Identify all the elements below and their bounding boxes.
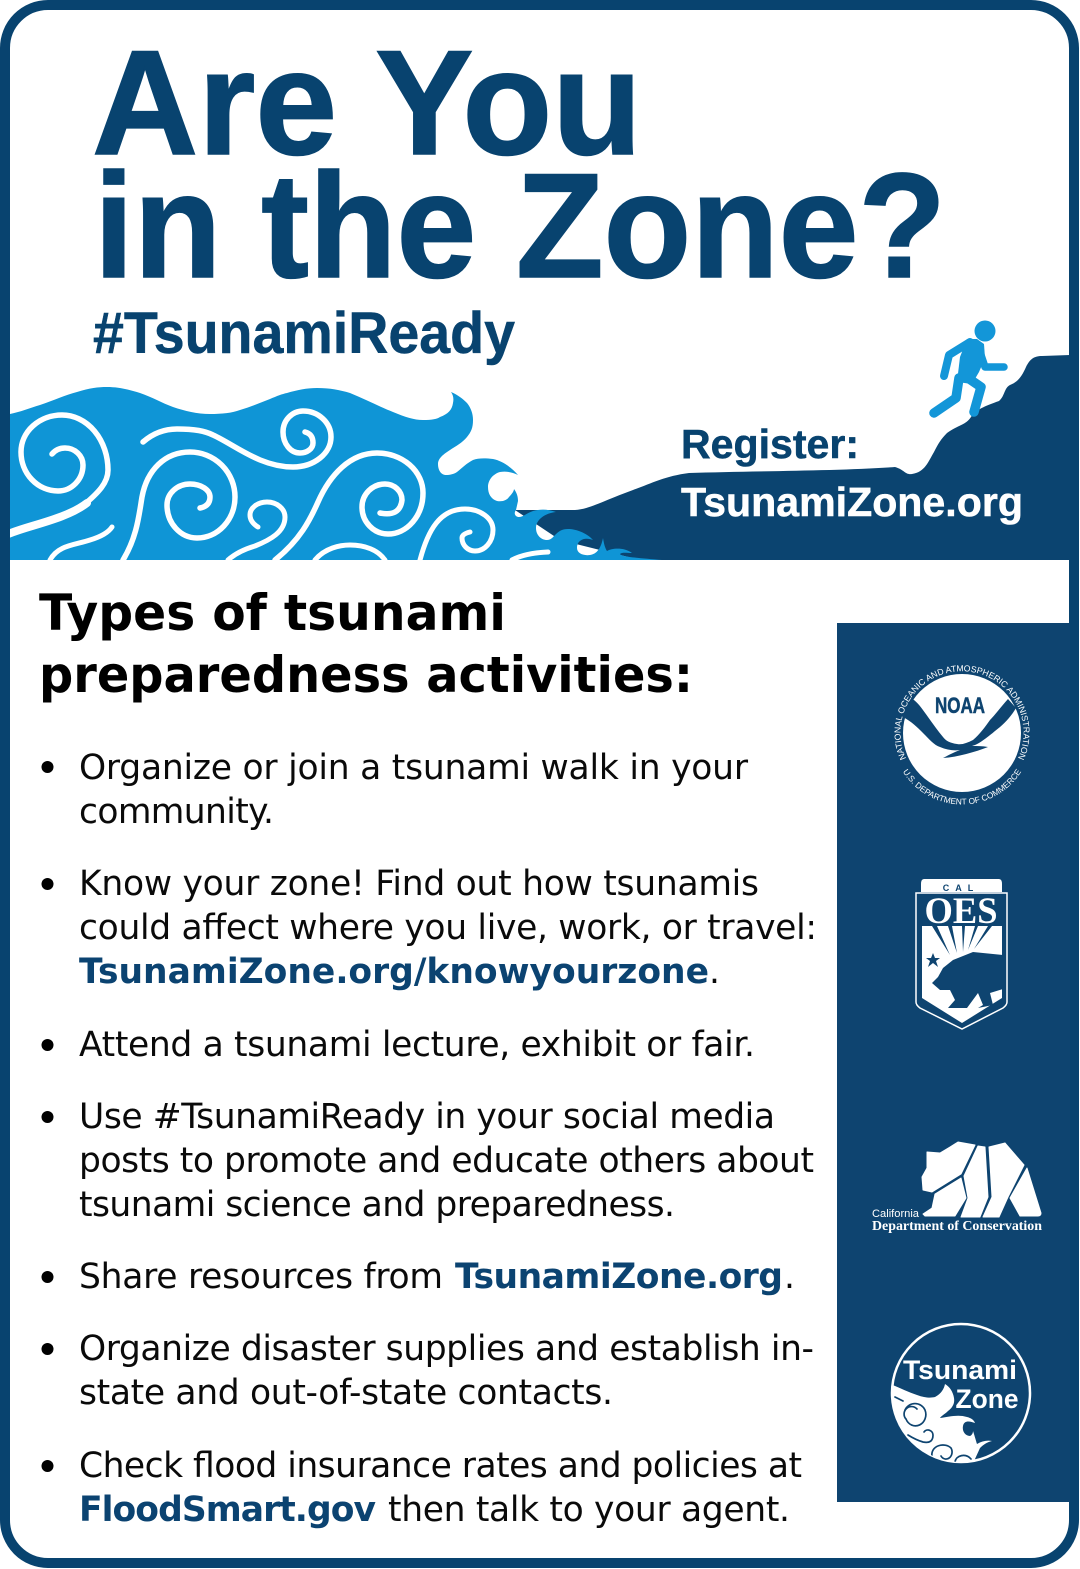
logo: California Department of Conservation: California — [872, 1208, 920, 1220]
item: know your zone: could affect where you live, work, or travel: — [79, 908, 817, 948]
heading: Types of tsunami — [39, 584, 506, 642]
title: in the Zone? — [94, 142, 946, 309]
logo: NOAA — [894, 665, 1030, 804]
heading: preparedness activities: — [39, 646, 693, 704]
item: know your zone — [42, 864, 817, 992]
item: social media: posts to promote and educate others about — [79, 1141, 814, 1181]
item: share resources — [42, 1257, 795, 1297]
logo: Cal OES: CAL — [943, 883, 979, 893]
item: share resources: . — [784, 1257, 795, 1297]
register call to action: Register: — [681, 421, 859, 467]
panel: partner logos — [837, 623, 1069, 1502]
logo: Tsunami Zone: Zone — [956, 1384, 1018, 1414]
item: disaster supplies: state and out-of-state contacts. — [79, 1373, 613, 1413]
item: flood insurance: FloodSmart.gov — [79, 1490, 376, 1530]
item: disaster supplies: Organize disaster supplies and establish in- — [79, 1329, 814, 1369]
logo: NOAA: U.S. DEPARTMENT OF COMMERCE — [904, 768, 1022, 804]
logo: Tsunami Zone — [890, 1324, 1030, 1470]
hashtag: #TsunamiReady — [93, 301, 515, 366]
item: social media: tsunami science and preparedness. — [79, 1185, 675, 1225]
item: social media: Use #TsunamiReady in your social media — [79, 1097, 775, 1137]
illustration: wave and hillside — [6, 320, 1070, 560]
register call to action: TsunamiZone.org — [681, 479, 1023, 525]
heading — [39, 584, 693, 704]
logo: California Department of Conservation — [872, 1142, 1042, 1233]
item: share resources: TsunamiZone.org — [455, 1257, 783, 1297]
item: flood insurance: then talk to your agent. — [388, 1490, 790, 1530]
logo: NOAA: NOAA — [935, 693, 985, 718]
hillside — [515, 355, 1070, 560]
item: tsunami walk: Organize or join a tsunami walk in your — [79, 748, 749, 788]
title: Are You — [92, 19, 642, 186]
item: know your zone: TsunamiZone.org/knowyourzone — [79, 952, 709, 992]
icon: running person — [934, 320, 1004, 413]
item: flood insurance: Check flood insurance rates and policies at — [79, 1446, 802, 1486]
register call to action — [681, 421, 1023, 525]
item: disaster supplies — [42, 1329, 814, 1413]
wave — [10, 387, 662, 560]
item: know your zone: . — [709, 952, 720, 992]
item: tsunami walk: community. — [79, 792, 274, 832]
logo: Cal OES: OES — [924, 891, 998, 932]
item: flood insurance — [42, 1446, 802, 1530]
item: tsunami walk — [42, 748, 749, 832]
logo: Cal OES — [916, 879, 1007, 1029]
logo: Tsunami Zone: Tsunami — [903, 1355, 1017, 1385]
item: social media — [42, 1097, 814, 1225]
item: know your zone: Know your zone! Find out how tsunamis — [79, 864, 759, 904]
item: attend lecture: Attend a tsunami lecture, exhibit or fair. — [79, 1025, 755, 1065]
wave swirls — [6, 411, 548, 560]
title — [92, 19, 946, 309]
logo: California Department of Conservation: Department of Conservation — [872, 1218, 1042, 1233]
item: share resources: Share resources from — [79, 1257, 443, 1297]
activity list — [42, 748, 817, 1530]
logo: NOAA: NATIONAL OCEANIC AND ATMOSPHERIC ADMINISTRATION — [894, 665, 1030, 760]
